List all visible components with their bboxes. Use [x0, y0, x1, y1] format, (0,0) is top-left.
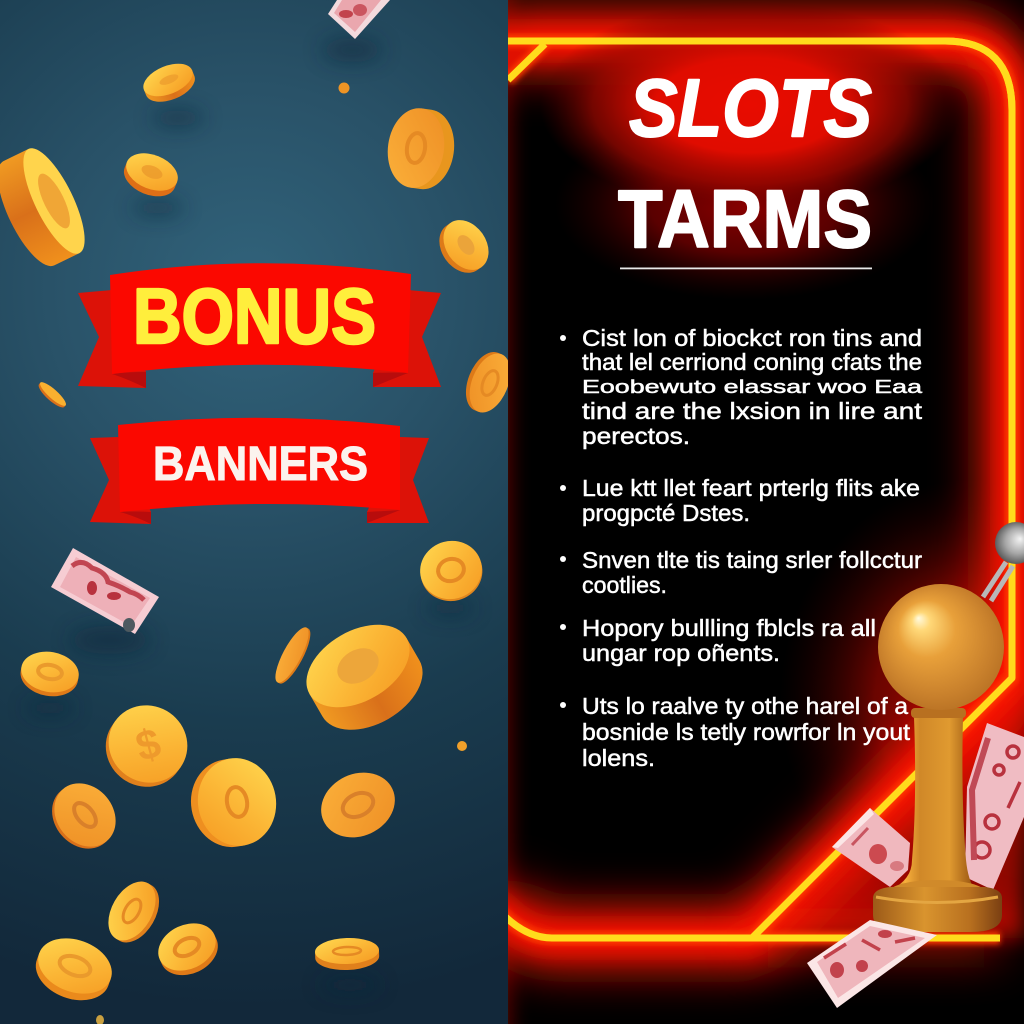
BANNERS text: BANNERS — [153, 438, 368, 491]
coin bottom right — [315, 937, 380, 971]
bullet 5: bosnide ls tetly rowrfor ln yout — [582, 719, 911, 745]
banner: BONUS — [78, 263, 441, 388]
coin upper left — [124, 153, 178, 196]
bill top — [328, 0, 390, 39]
coin at panel edge — [466, 352, 508, 412]
lower base — [873, 887, 1002, 932]
bullet 1 — [560, 325, 923, 449]
bullet 3: cootlies. — [582, 572, 667, 598]
lever arm — [983, 562, 1013, 601]
bullet 4 — [560, 615, 876, 666]
SLOTS text: SLOTS — [629, 63, 872, 154]
panel: left blue background — [0, 0, 508, 1024]
gold ball — [878, 584, 1004, 710]
bill behind lever, right — [965, 723, 1024, 890]
title: TARMS: TARMS — [618, 174, 872, 265]
bullet 1: Eoobewuto elassar woo Eaa — [582, 377, 923, 397]
bullet 3: Snven tlte tis taing srler follcctur — [582, 547, 922, 573]
tiny coin top — [338, 82, 350, 94]
bullet 2: Lue ktt llet feart prterlg flits ake — [582, 475, 920, 501]
bullet 1: perectos. — [582, 423, 690, 449]
coin right — [439, 220, 489, 273]
text block: terms list — [560, 325, 923, 771]
bill left — [51, 548, 159, 634]
title underline — [620, 268, 872, 269]
ribbon body — [110, 263, 411, 374]
bullet 3 — [560, 547, 922, 598]
coin upper right — [388, 108, 454, 190]
bullet 2 — [560, 475, 920, 526]
title: SLOTS — [546, 16, 952, 292]
ribbon body — [118, 418, 400, 512]
neon top line over title glow — [508, 41, 1012, 110]
bullet 1: that lel cerriond coning cfats the — [582, 349, 922, 375]
coin right of bill — [420, 540, 482, 602]
coin tilted bottom — [108, 882, 160, 942]
bullet 1: Cist lon of biockct ron tins and — [582, 325, 922, 351]
bullet 1: tind are the lxsion in lire ant — [582, 398, 923, 424]
large coin at left edge — [0, 148, 85, 266]
coin bottom middle — [158, 923, 218, 976]
large coin center right — [306, 624, 423, 730]
title lower glow — [572, 154, 919, 292]
coin shadows — [26, 38, 474, 993]
icon: slot machine lever — [873, 522, 1024, 932]
BONUS text: BONUS — [133, 272, 376, 360]
ribbon tails — [78, 290, 441, 388]
bullet 4: Hopory bullling fblcls ra all — [582, 615, 876, 641]
upper base — [889, 880, 985, 904]
panel: right neon background — [508, 0, 1024, 1024]
lever stem — [890, 717, 975, 890]
bill in front of lever — [832, 808, 910, 887]
base top ring — [876, 897, 998, 902]
bullet 2: progpcté Dstes. — [582, 500, 750, 526]
bullet 5 — [560, 693, 911, 771]
coin lower right — [321, 772, 395, 838]
left panel coins and bills — [0, 0, 518, 1024]
neon frame — [490, 0, 1024, 1024]
tiny coin bottom edge — [96, 1015, 104, 1024]
bullet 5: lolens. — [582, 745, 655, 771]
dollar coin — [106, 705, 188, 787]
ribbon tails — [90, 437, 429, 524]
dollar coin: $ — [131, 719, 165, 770]
silver knob — [995, 522, 1024, 564]
coin top — [143, 64, 195, 102]
stem collar — [911, 708, 966, 718]
coin lower left — [52, 783, 116, 849]
bullet 5: Uts lo raalve ty othe harel of a — [582, 693, 908, 719]
bill at lever base — [807, 920, 937, 1008]
thin coin left — [38, 382, 66, 408]
thin coin center — [275, 627, 310, 684]
banner: BANNERS — [90, 418, 429, 524]
bullet 4: ungar rop oñents. — [582, 640, 780, 666]
tiny coin right — [457, 741, 467, 751]
title glow — [546, 16, 952, 193]
coin bottom center — [190, 758, 276, 848]
coin left middle — [20, 652, 79, 696]
coin bottom left — [36, 938, 112, 1000]
